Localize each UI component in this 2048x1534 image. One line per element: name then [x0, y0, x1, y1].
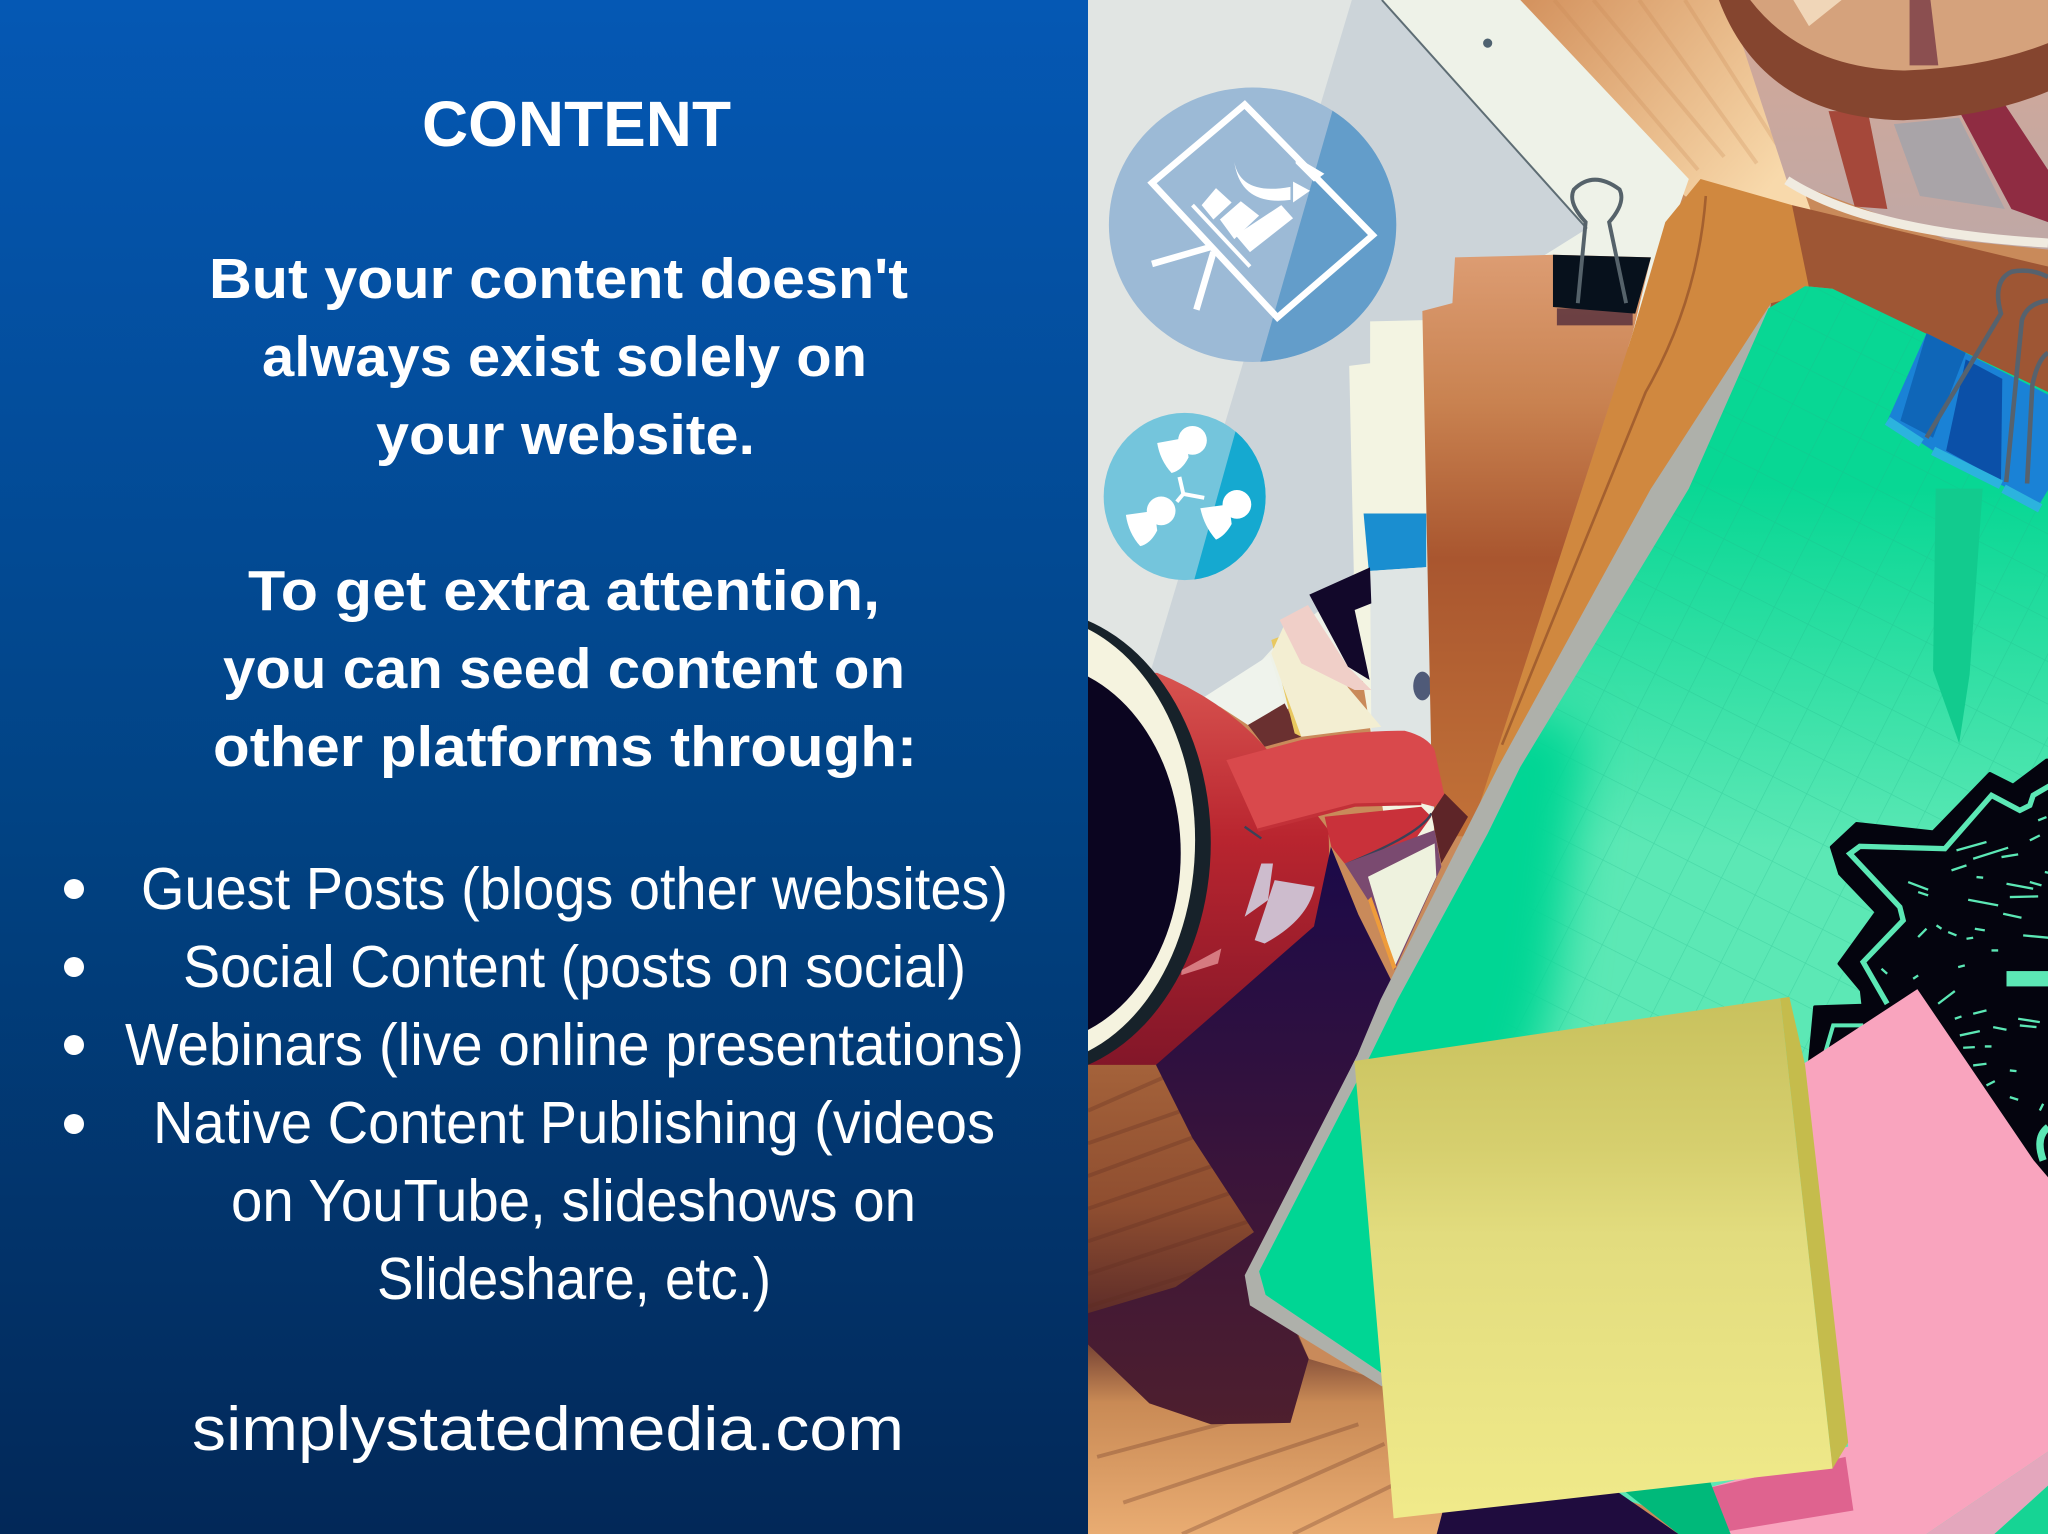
- desk lower left: [1088, 1065, 1450, 1534]
- bullet list: content platforms: Guest Posts (blogs other websites): [141, 856, 1008, 922]
- bullet list: content platforms: on YouTube, slideshows on: [231, 1168, 916, 1234]
- website URL: simplystatedmedia.com: [192, 1395, 904, 1464]
- pink sticky note: [1707, 989, 2048, 1534]
- clip shadow on notebook: [1933, 489, 1983, 743]
- title: CONTENT: [422, 88, 731, 160]
- bullet list: content platforms: [64, 856, 1024, 1312]
- mug shadow: [1088, 847, 1398, 1424]
- white paper under the handle: [1345, 793, 1468, 970]
- black starburst on notebook: [1810, 760, 2048, 1194]
- icon: presentation board circle: [1108, 88, 1396, 362]
- pencil jar: [1719, 0, 2048, 250]
- text block: intro statement: always exist solely on: [262, 325, 867, 389]
- folder: orange spine: [1480, 179, 1809, 802]
- folder: shadowed back: [1768, 205, 2048, 405]
- bullet list: content platforms: Social Content (posts on social): [183, 934, 966, 1000]
- green notebook corners below notes: [1436, 1482, 2048, 1534]
- bullet list: content platforms: Native Content Publishing (videos: [153, 1090, 995, 1156]
- icon: network people circle: [1104, 413, 1273, 588]
- bullet list: content platforms: Slideshare, etc.): [377, 1246, 771, 1312]
- green notebook edge: [1245, 303, 1771, 1386]
- text block: seeding statement: other platforms through:: [213, 715, 917, 779]
- tablet: white bezel: [1254, 0, 1689, 722]
- text block: intro statement: your website.: [376, 403, 755, 467]
- black binder clip: [1553, 180, 1651, 325]
- green notebook: [1259, 286, 2048, 1534]
- panel: desk photo illustration: [1088, 0, 2048, 1534]
- paper stack: [1349, 320, 1434, 836]
- panel: blue text column: [0, 0, 1088, 1534]
- wooden desk, top: [1520, 0, 1810, 210]
- blue binder clip: [1887, 271, 2048, 508]
- text block: seeding statement: To get extra attention,: [248, 559, 880, 623]
- red mug: [1088, 620, 1444, 1065]
- tablet: screen: [1088, 0, 1587, 712]
- bullet list: content platforms: Webinars (live online presentations): [125, 1012, 1024, 1078]
- yellow sticky note: [1354, 997, 1848, 1518]
- text block: intro statement: But your content doesn't: [209, 247, 908, 311]
- text block: seeding statement: [213, 559, 917, 779]
- text block: seeding statement: you can seed content on: [223, 637, 905, 701]
- card and black swatch: [1205, 567, 1381, 747]
- text block: intro statement: [209, 247, 908, 467]
- cork clipboard: [1422, 255, 1651, 836]
- mug handle: [1181, 731, 1445, 975]
